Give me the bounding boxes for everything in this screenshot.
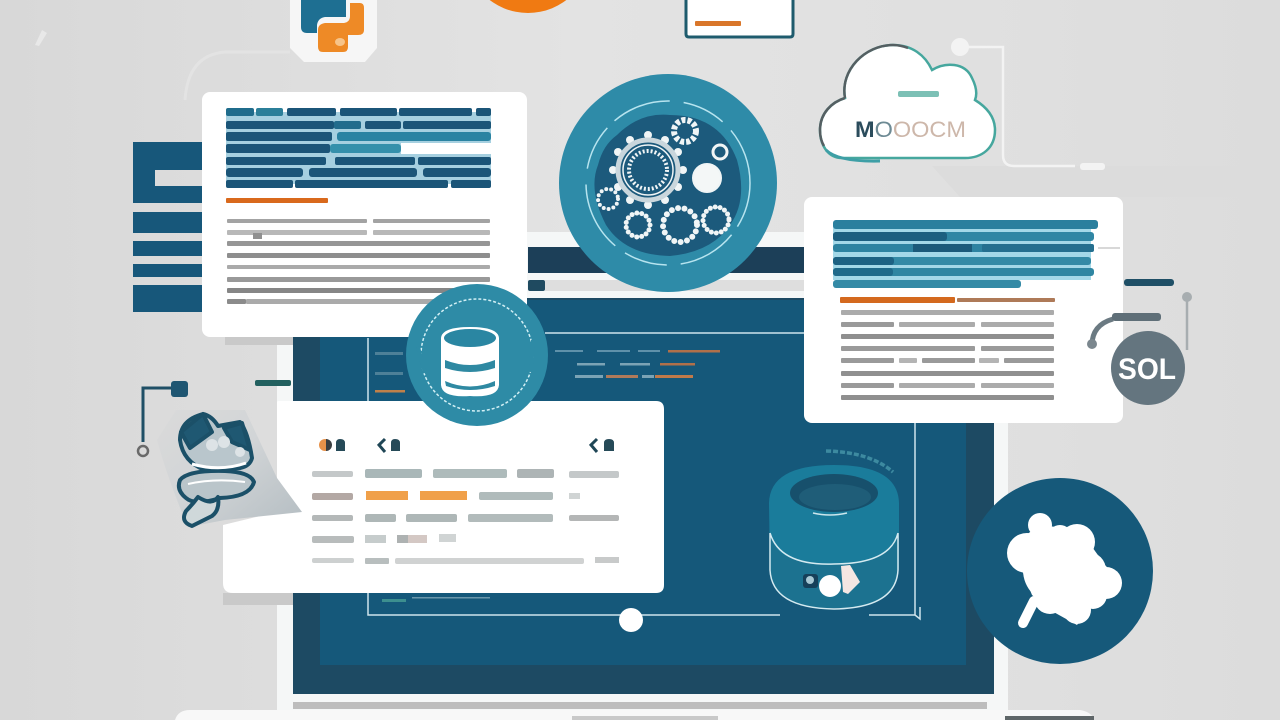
card body <box>202 92 527 337</box>
table header icons <box>319 439 614 452</box>
panel: right document <box>804 197 1192 423</box>
code block <box>833 220 1120 288</box>
icon: python logo card <box>290 0 377 62</box>
card shadow <box>223 593 293 605</box>
icon: SOL badge <box>1111 331 1185 405</box>
connector <box>138 380 291 456</box>
browser bar <box>528 247 804 291</box>
orange rule <box>226 198 328 203</box>
code lines <box>375 350 720 602</box>
database cylinder <box>441 327 499 396</box>
laptop screen <box>293 298 994 694</box>
code block <box>226 108 491 188</box>
icon: python snake on paper <box>138 380 302 527</box>
icon: orange circle <box>465 0 591 13</box>
icon: gears circle <box>559 74 777 292</box>
grey table lines <box>841 310 1054 400</box>
slider dot <box>619 608 643 632</box>
paper <box>157 410 302 527</box>
card body <box>223 401 664 593</box>
cloud label: MOOOCM <box>855 117 966 142</box>
laptop <box>175 232 1094 720</box>
laptop base <box>175 702 1094 720</box>
panel: table card <box>223 401 664 605</box>
gears <box>598 120 729 242</box>
side tabs <box>133 142 202 312</box>
cloud shape <box>820 45 995 158</box>
orange rule <box>840 297 955 303</box>
snake <box>179 414 254 526</box>
card body <box>804 197 1123 423</box>
icon: database circle <box>406 284 548 426</box>
grey text lines <box>227 219 490 304</box>
icon: mongo cloud <box>820 38 1105 170</box>
screen guide lines <box>368 333 920 619</box>
icon: teal cylinder <box>769 451 899 609</box>
connector <box>951 38 1105 170</box>
screen inner panel <box>320 300 966 665</box>
laptop frame <box>277 232 1008 710</box>
icon: SOL badge: SOL <box>1118 353 1176 386</box>
icon: cloud and tree circle <box>967 478 1153 664</box>
panel: left document <box>133 92 527 345</box>
table rows <box>312 469 619 564</box>
card shadow <box>225 337 293 345</box>
top card <box>686 0 793 37</box>
dashed ring <box>586 101 750 265</box>
dark blob <box>594 115 741 256</box>
SOL connectors <box>1087 279 1192 350</box>
